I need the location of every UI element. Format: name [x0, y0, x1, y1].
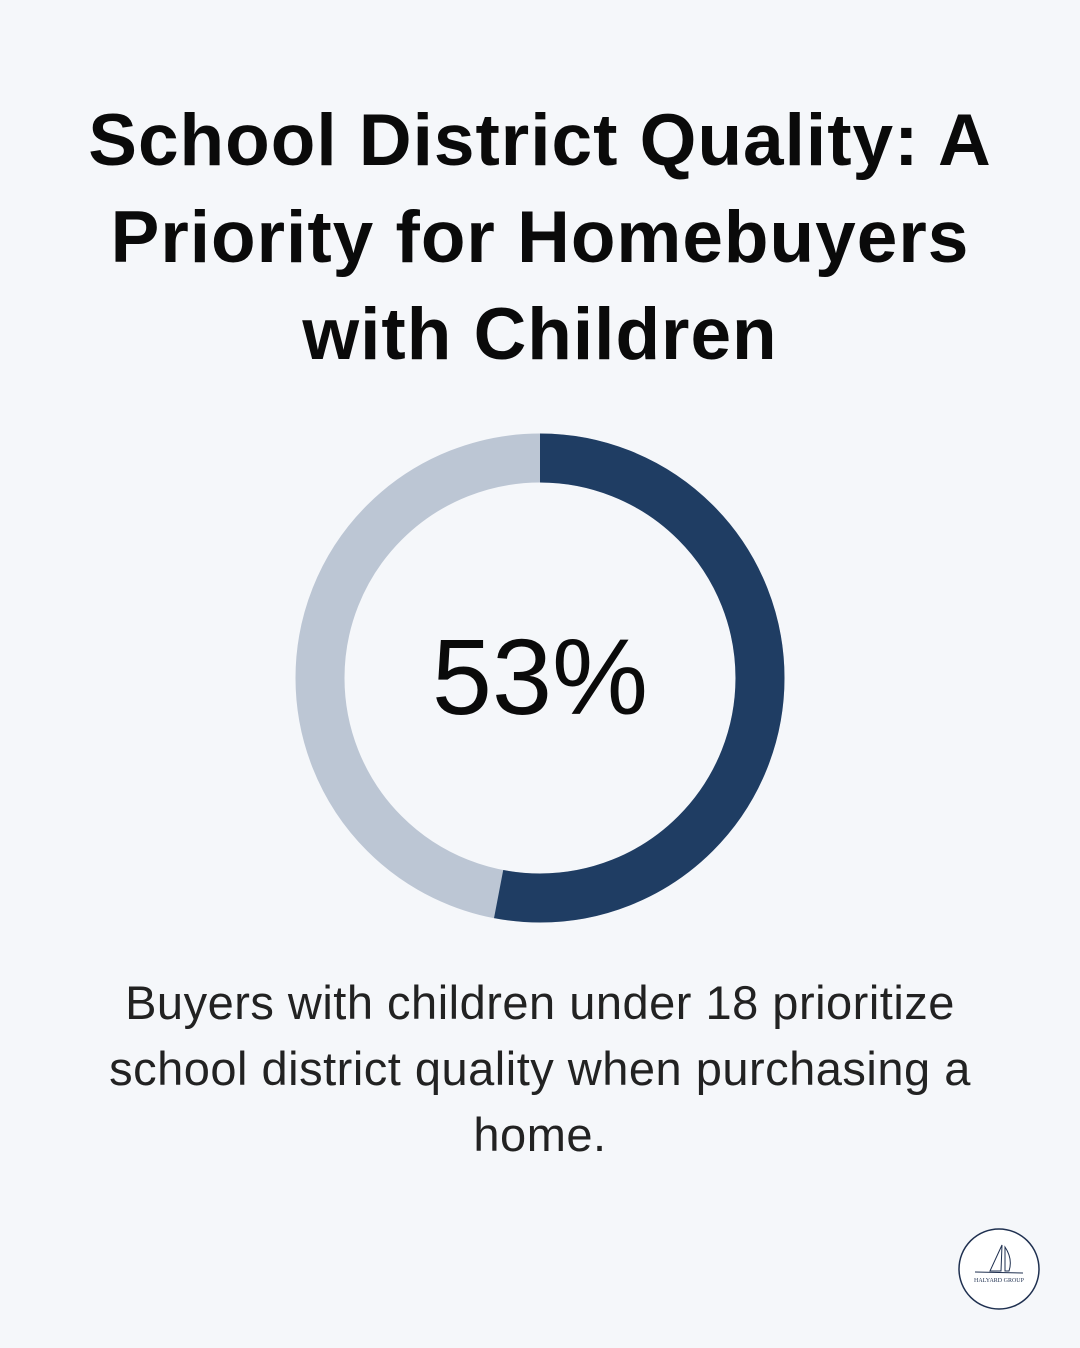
- body text: school district quality when purchasing a: [109, 1042, 971, 1095]
- logo: Halyard Group: [958, 1228, 1040, 1310]
- donut chart: 53%: [432, 616, 648, 737]
- body text: Buyers with children under 18 prioritize: [125, 976, 955, 1029]
- body text: home.: [473, 1108, 607, 1161]
- title: School District Quality: A: [88, 100, 992, 181]
- logo: Halyard Group: HALYARD GROUP: [974, 1278, 1025, 1284]
- title: Priority for Homebuyers: [111, 197, 969, 278]
- body text: [109, 976, 971, 1161]
- title: with Children: [302, 294, 778, 375]
- title: [88, 100, 992, 375]
